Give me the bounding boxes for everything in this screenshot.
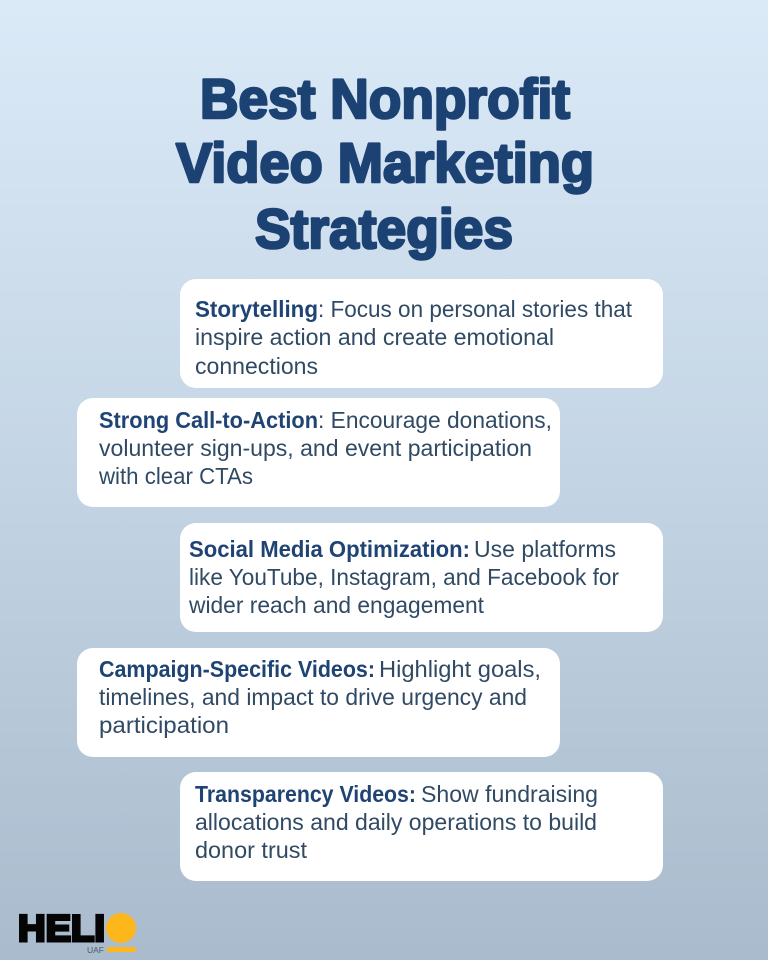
- panel: campaign-specific videos: participation: [99, 712, 229, 738]
- title: Best Nonprofit: [200, 67, 570, 130]
- panel: storytelling: inspire action and create emotional: [195, 324, 554, 350]
- panel: strong call-to-action: with clear CTAs: [98, 463, 253, 489]
- panel: storytelling: : Focus on personal stories that: [318, 296, 633, 322]
- panel: transparency videos: Show fundraising: [421, 781, 598, 807]
- panel: transparency videos: donor trust: [195, 837, 308, 863]
- panel: transparency videos: Transparency Videos:: [195, 781, 416, 807]
- panel: strong call-to-action: : Encourage donations,: [318, 407, 552, 433]
- panel: social media optimization: [180, 523, 663, 632]
- panel: campaign-specific videos: Highlight goals,: [379, 656, 541, 682]
- title: Video Marketing: [176, 131, 594, 194]
- panel: social media optimization: Social Media Optimization:: [189, 536, 470, 562]
- panel: storytelling: connections: [195, 353, 318, 379]
- panel: social media optimization: Use platforms: [474, 536, 616, 562]
- logo: HELIO UAF: [18, 908, 136, 955]
- panel: campaign-specific videos: Campaign-Specific Videos:: [99, 656, 375, 682]
- logo: HELIO UAF: HELI: [18, 908, 105, 949]
- panel: campaign-specific videos: [77, 648, 560, 757]
- panel: strong call-to-action: Strong Call-to-Action: [99, 407, 318, 433]
- logo: HELIO UAF: UAF: [87, 946, 104, 955]
- panel: transparency videos: allocations and daily operations to build: [195, 809, 597, 835]
- panel: social media optimization: like YouTube, Instagram, and Facebook for: [189, 564, 619, 590]
- title: Strategies: [255, 197, 513, 260]
- panel: campaign-specific videos: timelines, and impact to drive urgency and: [99, 684, 527, 710]
- panel: transparency videos: [180, 772, 663, 881]
- title: [176, 67, 594, 260]
- panel: storytelling: Storytelling: [195, 296, 318, 322]
- panel: strong call-to-action: volunteer sign-ups, and event participation: [99, 435, 532, 461]
- panel: strong call-to-action: [77, 398, 560, 507]
- panel: storytelling: [180, 279, 663, 388]
- panel: social media optimization: wider reach and engagement: [188, 592, 485, 618]
